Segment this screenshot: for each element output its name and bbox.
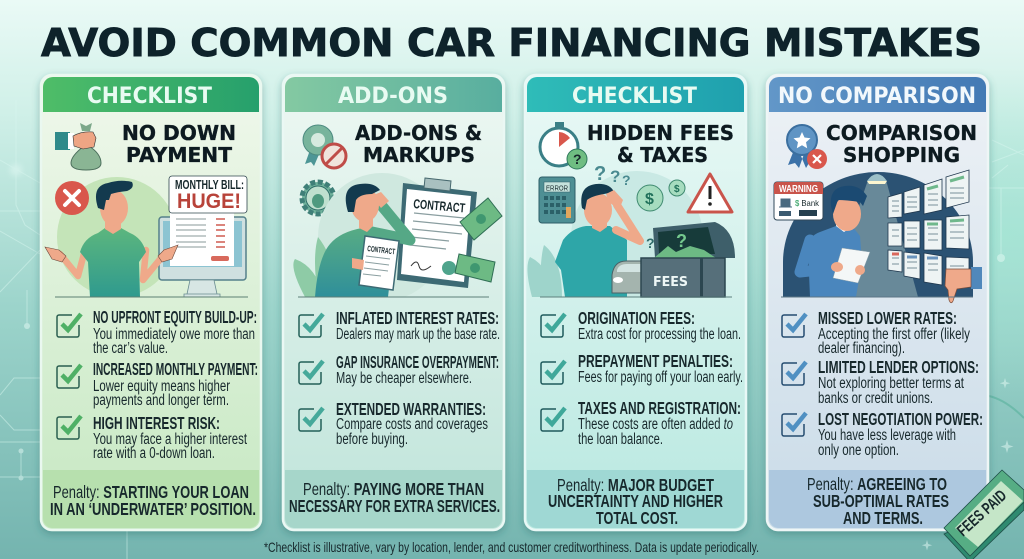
- illustration: person reading offer before wall of options: [783, 170, 973, 297]
- penalty: [769, 470, 986, 528]
- checklist items: the car’s value.: [93, 340, 168, 357]
- checklist items: GAP INSURANCE OVERPAYMENT:: [336, 352, 499, 372]
- checklist items: Fees for paying off your loan early.: [578, 369, 743, 386]
- heading: comparison shopping: [826, 121, 977, 167]
- penalty: [285, 470, 502, 528]
- illustration: confused person with fees chest: [527, 163, 735, 303]
- heading: checklist: CHECKLIST: [572, 84, 697, 109]
- checklist items: INCREASED MONTHLY PAYMENT:: [93, 359, 258, 379]
- checklist items: Not exploring better terms at: [818, 375, 965, 392]
- penalty: Penalty: PAYING MORE THAN: [303, 479, 484, 499]
- icon: gear with money bag: [302, 182, 334, 214]
- icon: stopwatch: ?: [573, 151, 582, 167]
- checklist items: You have less leverage with: [818, 427, 956, 444]
- checklist items: [541, 308, 743, 448]
- icon: banknotes: [455, 198, 502, 282]
- checklist items: HIGH INTEREST RISK:: [93, 413, 220, 433]
- icon: warning bank card: WARNING: [779, 184, 818, 195]
- icon: question marks: ?: [610, 167, 620, 186]
- bill label: MONTHLY BILL:: [175, 178, 244, 192]
- checklist items: dealer financing).: [818, 340, 905, 357]
- panel: add-ons and markups: [283, 75, 504, 530]
- checklist items: only one option.: [818, 442, 899, 459]
- icon: calculator: [539, 177, 575, 223]
- icon: badge with prohibition sign: [303, 125, 346, 168]
- checklist items: [782, 308, 983, 459]
- icon: dollar bubbles: [637, 180, 685, 211]
- bill label: HUGE!: [177, 190, 241, 213]
- penalty: Penalty: MAJOR BUDGET: [557, 475, 714, 495]
- panel: hidden fees and taxes: [525, 75, 746, 530]
- icon: thumbs down: [945, 267, 982, 303]
- checklist items: These costs are often added to: [578, 416, 733, 433]
- icon: stopwatch: [540, 122, 587, 169]
- panel: comparison shopping: [767, 75, 988, 530]
- checklist items: EXTENDED WARRANTIES:: [336, 399, 486, 419]
- icon: question marks: ?: [622, 172, 631, 188]
- heading: no down payment: [122, 121, 236, 167]
- heading: hidden fees and taxes: [587, 121, 734, 167]
- icon: warning bank card: $ Bank: [795, 198, 820, 208]
- checklist items: rate with a 0-down loan.: [93, 445, 215, 462]
- icon: car: [612, 261, 641, 293]
- checklist items: Extra cost for processing the loan.: [578, 326, 741, 343]
- icon: ribbon badge: [787, 125, 827, 169]
- icon: fees chest: FEES: [653, 275, 688, 290]
- icon: fees paid banknotes: [944, 470, 1024, 559]
- checklist items: You may face a higher interest: [93, 431, 248, 448]
- wall of documents: [888, 170, 969, 287]
- illustration: person with huge monthly bill: [45, 176, 247, 297]
- heading: comparison shopping: SHOPPING: [843, 143, 960, 167]
- icon: question marks: [594, 163, 655, 251]
- icon: question marks: ?: [594, 163, 606, 185]
- heading: add-ons: ADD-ONS: [338, 84, 448, 109]
- illustration: person holding contract: CONTRACT: [413, 196, 466, 216]
- penalty: IN AN ‘UNDERWATER’ POSITION.: [50, 499, 256, 519]
- checklist items: You immediately owe more than: [93, 326, 255, 343]
- penalty: Penalty: AGREEING TO: [807, 474, 947, 494]
- icon: fees chest: ?: [676, 231, 687, 251]
- heading: hidden fees and taxes: & TAXES: [617, 143, 708, 167]
- heading: comparison shopping: COMPARISON: [826, 121, 977, 145]
- checklist items: [57, 307, 258, 462]
- icon: dollar bubbles: $: [674, 184, 680, 195]
- heading: no comparison: NO COMPARISON: [778, 84, 976, 109]
- checklist items: Lower equity means higher: [93, 378, 230, 395]
- checklist items: [299, 308, 500, 448]
- heading: add-ons and markups: [355, 121, 482, 167]
- checklist items: payments and longer term.: [93, 392, 229, 409]
- icon: hand with money bag: [55, 123, 101, 170]
- penalty: [43, 470, 259, 528]
- icon: warning bank card: [774, 182, 823, 220]
- heading: hidden fees and taxes: HIDDEN FEES: [587, 121, 734, 145]
- penalty: SUB-OPTIMAL RATES: [813, 491, 949, 511]
- icon: warning triangle: [688, 174, 732, 212]
- bill label: [175, 178, 244, 213]
- checklist items: MISSED LOWER RATES:: [818, 308, 957, 328]
- heading: checklist: CHECKLIST: [87, 84, 212, 109]
- icon: question marks: ?: [646, 235, 655, 251]
- checklist items: Compare costs and coverages: [336, 416, 488, 433]
- checklist items: PREPAYMENT PENALTIES:: [578, 351, 733, 371]
- heading: no down payment: PAYMENT: [126, 143, 232, 167]
- penalty: NECESSARY FOR EXTRA SERVICES.: [289, 496, 500, 516]
- title: AVOID COMMON CAR FINANCING MISTAKES: [41, 21, 982, 65]
- footnote: *Checklist is illustrative, vary by location, lender, and customer creditworthiness. Data is update periodically.: [264, 539, 759, 555]
- heading: no down payment: NO DOWN: [122, 121, 236, 145]
- checklist items: May be cheaper elsewhere.: [336, 370, 472, 387]
- illustration: person holding contract: CONTRACT: [367, 244, 396, 256]
- heading: add-ons and markups: ADD-ONS &: [355, 121, 482, 145]
- checklist items: Accepting the first offer (likely: [818, 326, 970, 343]
- checklist items: banks or credit unions.: [818, 390, 933, 407]
- penalty: TOTAL COST.: [596, 508, 678, 528]
- checklist items: INFLATED INTEREST RATES:: [336, 308, 499, 328]
- checklist items: ORIGINATION FEES:: [578, 308, 695, 328]
- panel: no down payment: [41, 75, 261, 530]
- penalty: [527, 470, 744, 528]
- checklist items: before buying.: [336, 431, 408, 448]
- icon: red x: [55, 181, 89, 215]
- icon: calculator: ERROR: [546, 184, 568, 192]
- checklist items: Dealers may mark up the base rate.: [336, 326, 500, 343]
- heading: add-ons and markups: MARKUPS: [363, 143, 475, 167]
- checklist items: TAXES AND REGISTRATION:: [578, 398, 741, 418]
- icon: dollar bubbles: $: [645, 191, 654, 208]
- checklist items: the loan balance.: [578, 431, 663, 448]
- icon: fees chest: [641, 222, 735, 297]
- penalty: Penalty: STARTING YOUR LOAN: [53, 482, 249, 502]
- penalty: AND TERMS.: [843, 508, 923, 528]
- checklist items: NO UPFRONT EQUITY BUILD-UP:: [93, 307, 257, 327]
- penalty: UNCERTAINTY AND HIGHER: [548, 491, 723, 511]
- illustration: person holding contract: [293, 173, 502, 301]
